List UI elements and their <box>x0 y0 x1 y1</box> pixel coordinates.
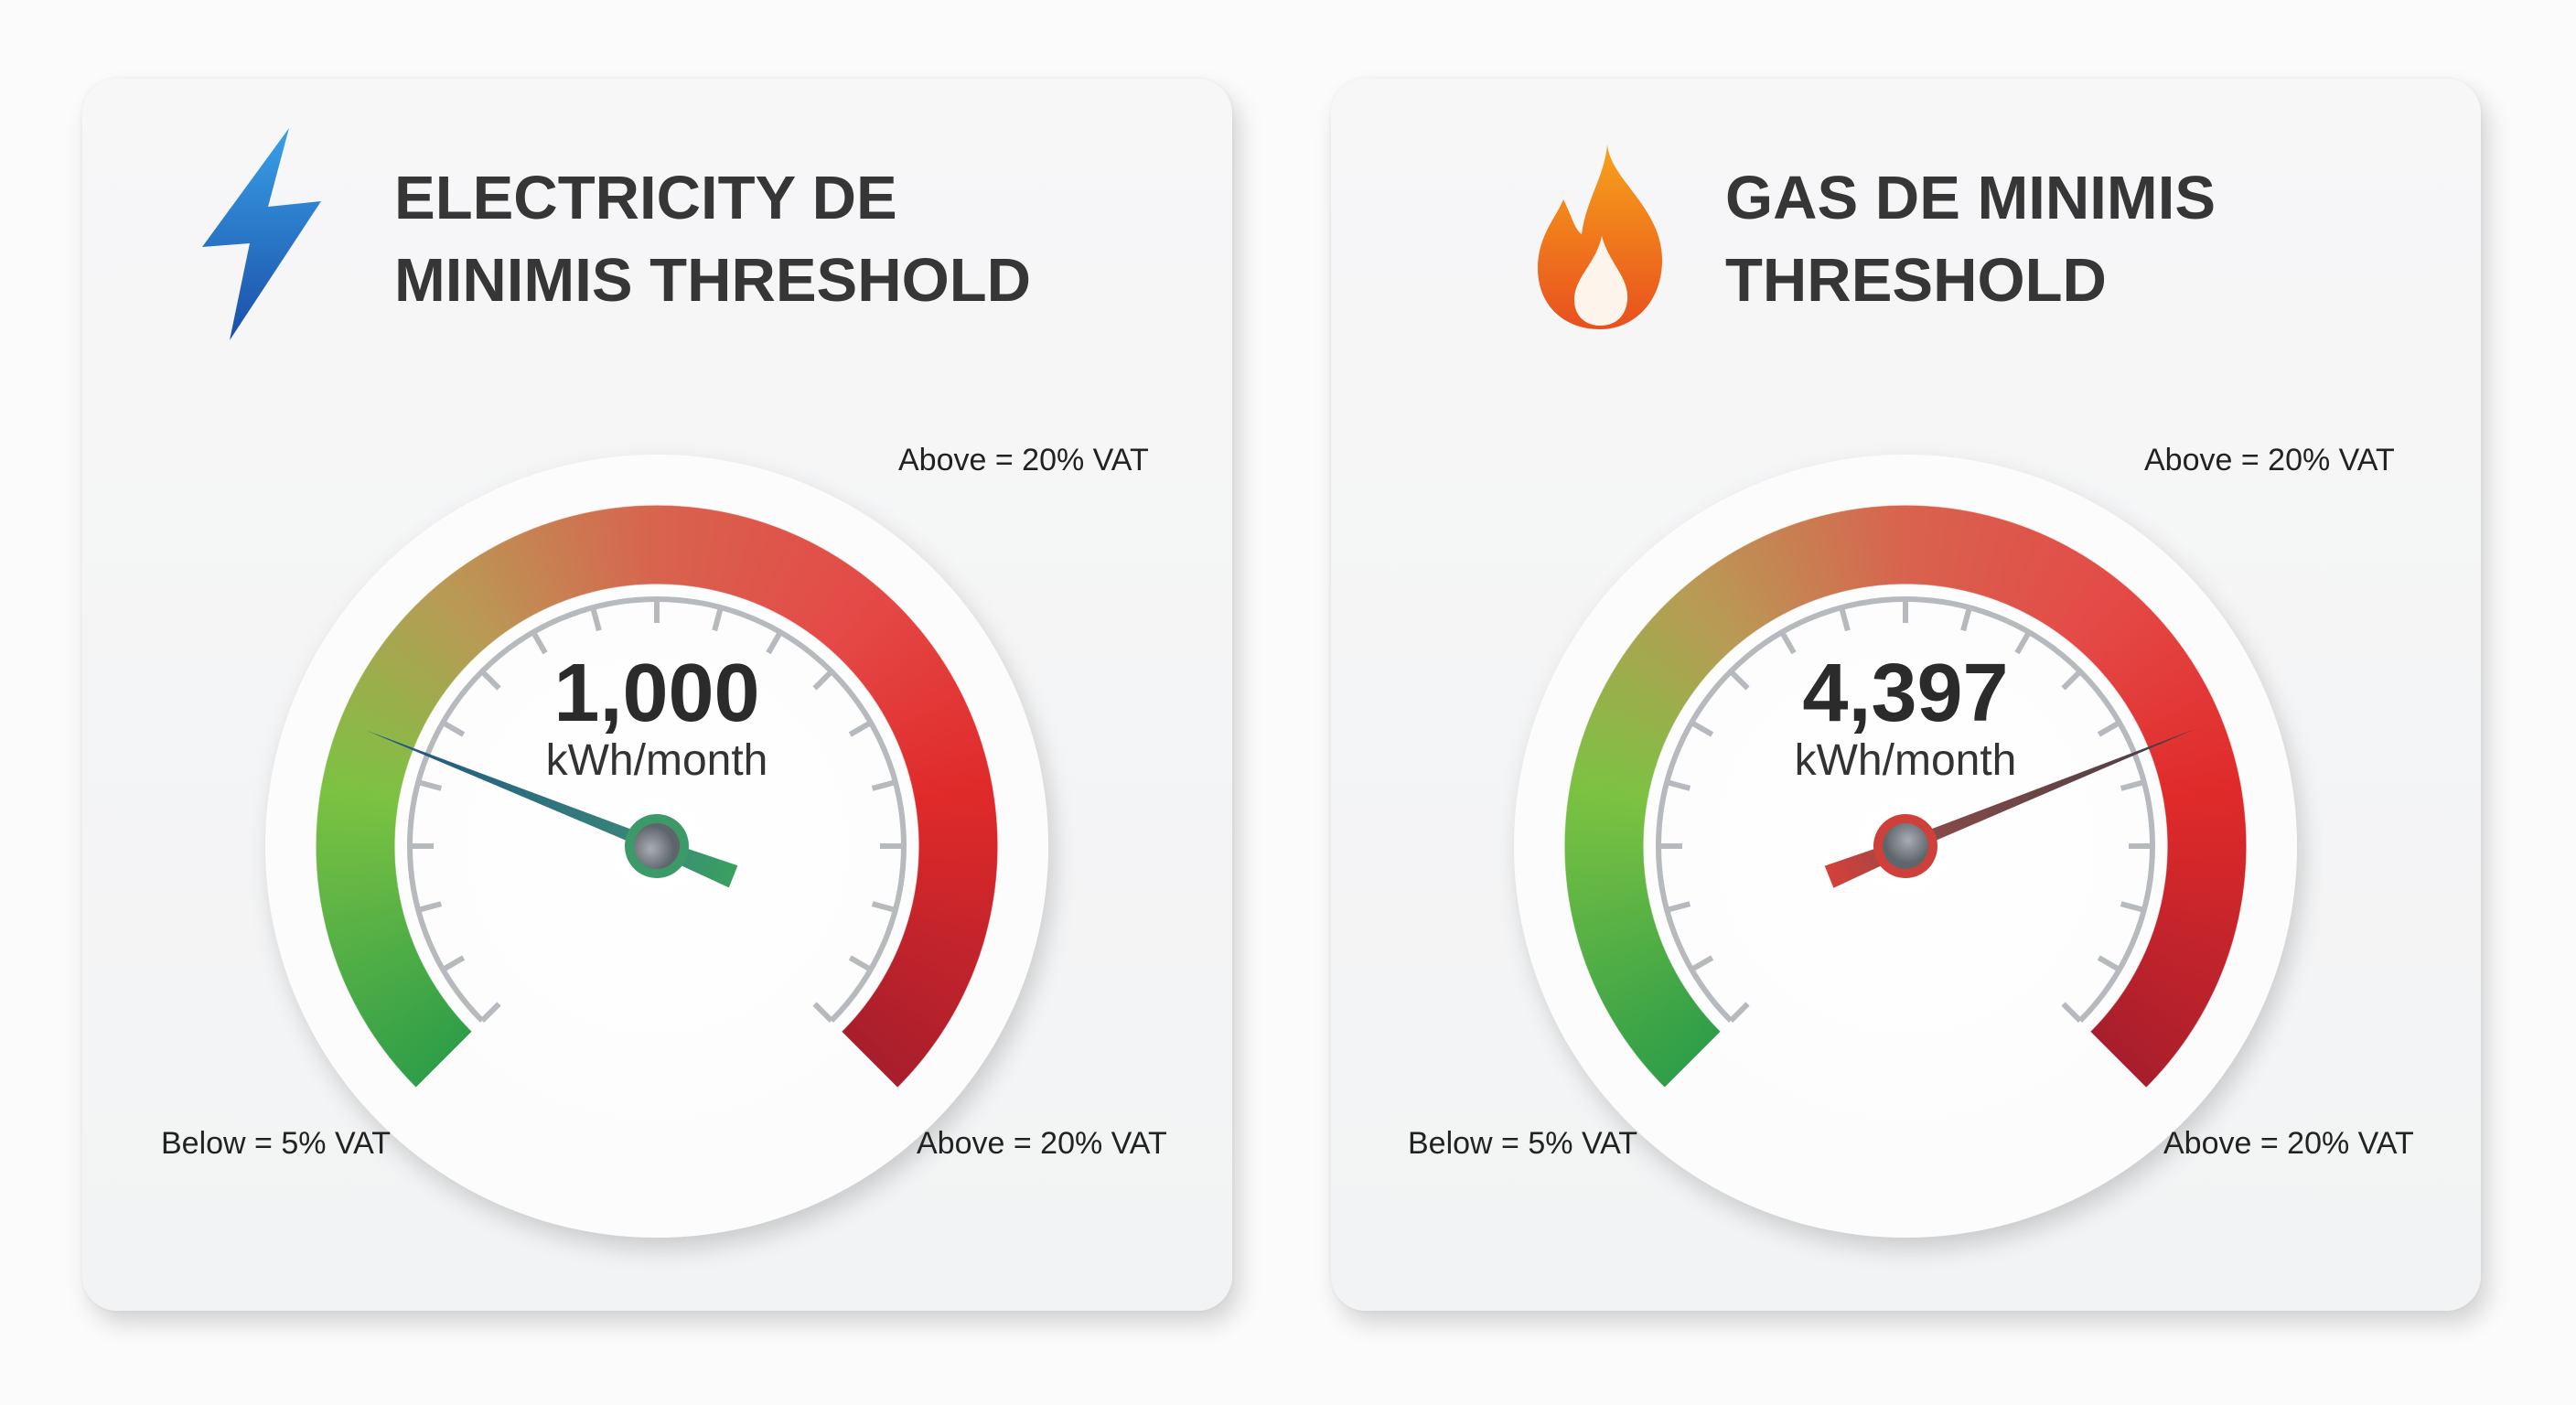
title: electricity: ELECTRICITY DE <box>394 164 897 232</box>
label: below: Below = 5% VAT <box>161 1126 391 1161</box>
icon: flame <box>1538 145 1663 329</box>
title: electricity <box>394 164 1031 315</box>
label: below: Below = 5% VAT <box>1408 1126 1637 1161</box>
label: above bottom: Above = 20% VAT <box>917 1126 1167 1161</box>
gauge: electricity: 1,000 <box>553 648 760 739</box>
gauge: gas <box>1509 470 2313 1259</box>
gauge: gas: 4,397 <box>1802 648 2009 739</box>
icon: lightning bolt <box>202 128 321 340</box>
title: gas: THRESHOLD <box>1725 246 2107 315</box>
panel: electricity <box>82 79 1232 1311</box>
title: gas <box>1725 164 2216 315</box>
label: above top: Above = 20% VAT <box>898 443 1149 477</box>
needle <box>354 701 746 906</box>
title: electricity: MINIMIS THRESHOLD <box>394 246 1031 315</box>
title: gas: GAS DE MINIMIS <box>1725 164 2216 232</box>
label: above top: Above = 20% VAT <box>2144 443 2395 477</box>
panel: gas <box>1331 79 2481 1311</box>
gauge: gas: kWh/month <box>1795 736 2016 785</box>
needle <box>1817 699 2207 906</box>
label: above bottom: Above = 20% VAT <box>2163 1126 2414 1161</box>
gauge: electricity <box>262 470 1063 1259</box>
gauge: electricity: kWh/month <box>546 736 767 785</box>
